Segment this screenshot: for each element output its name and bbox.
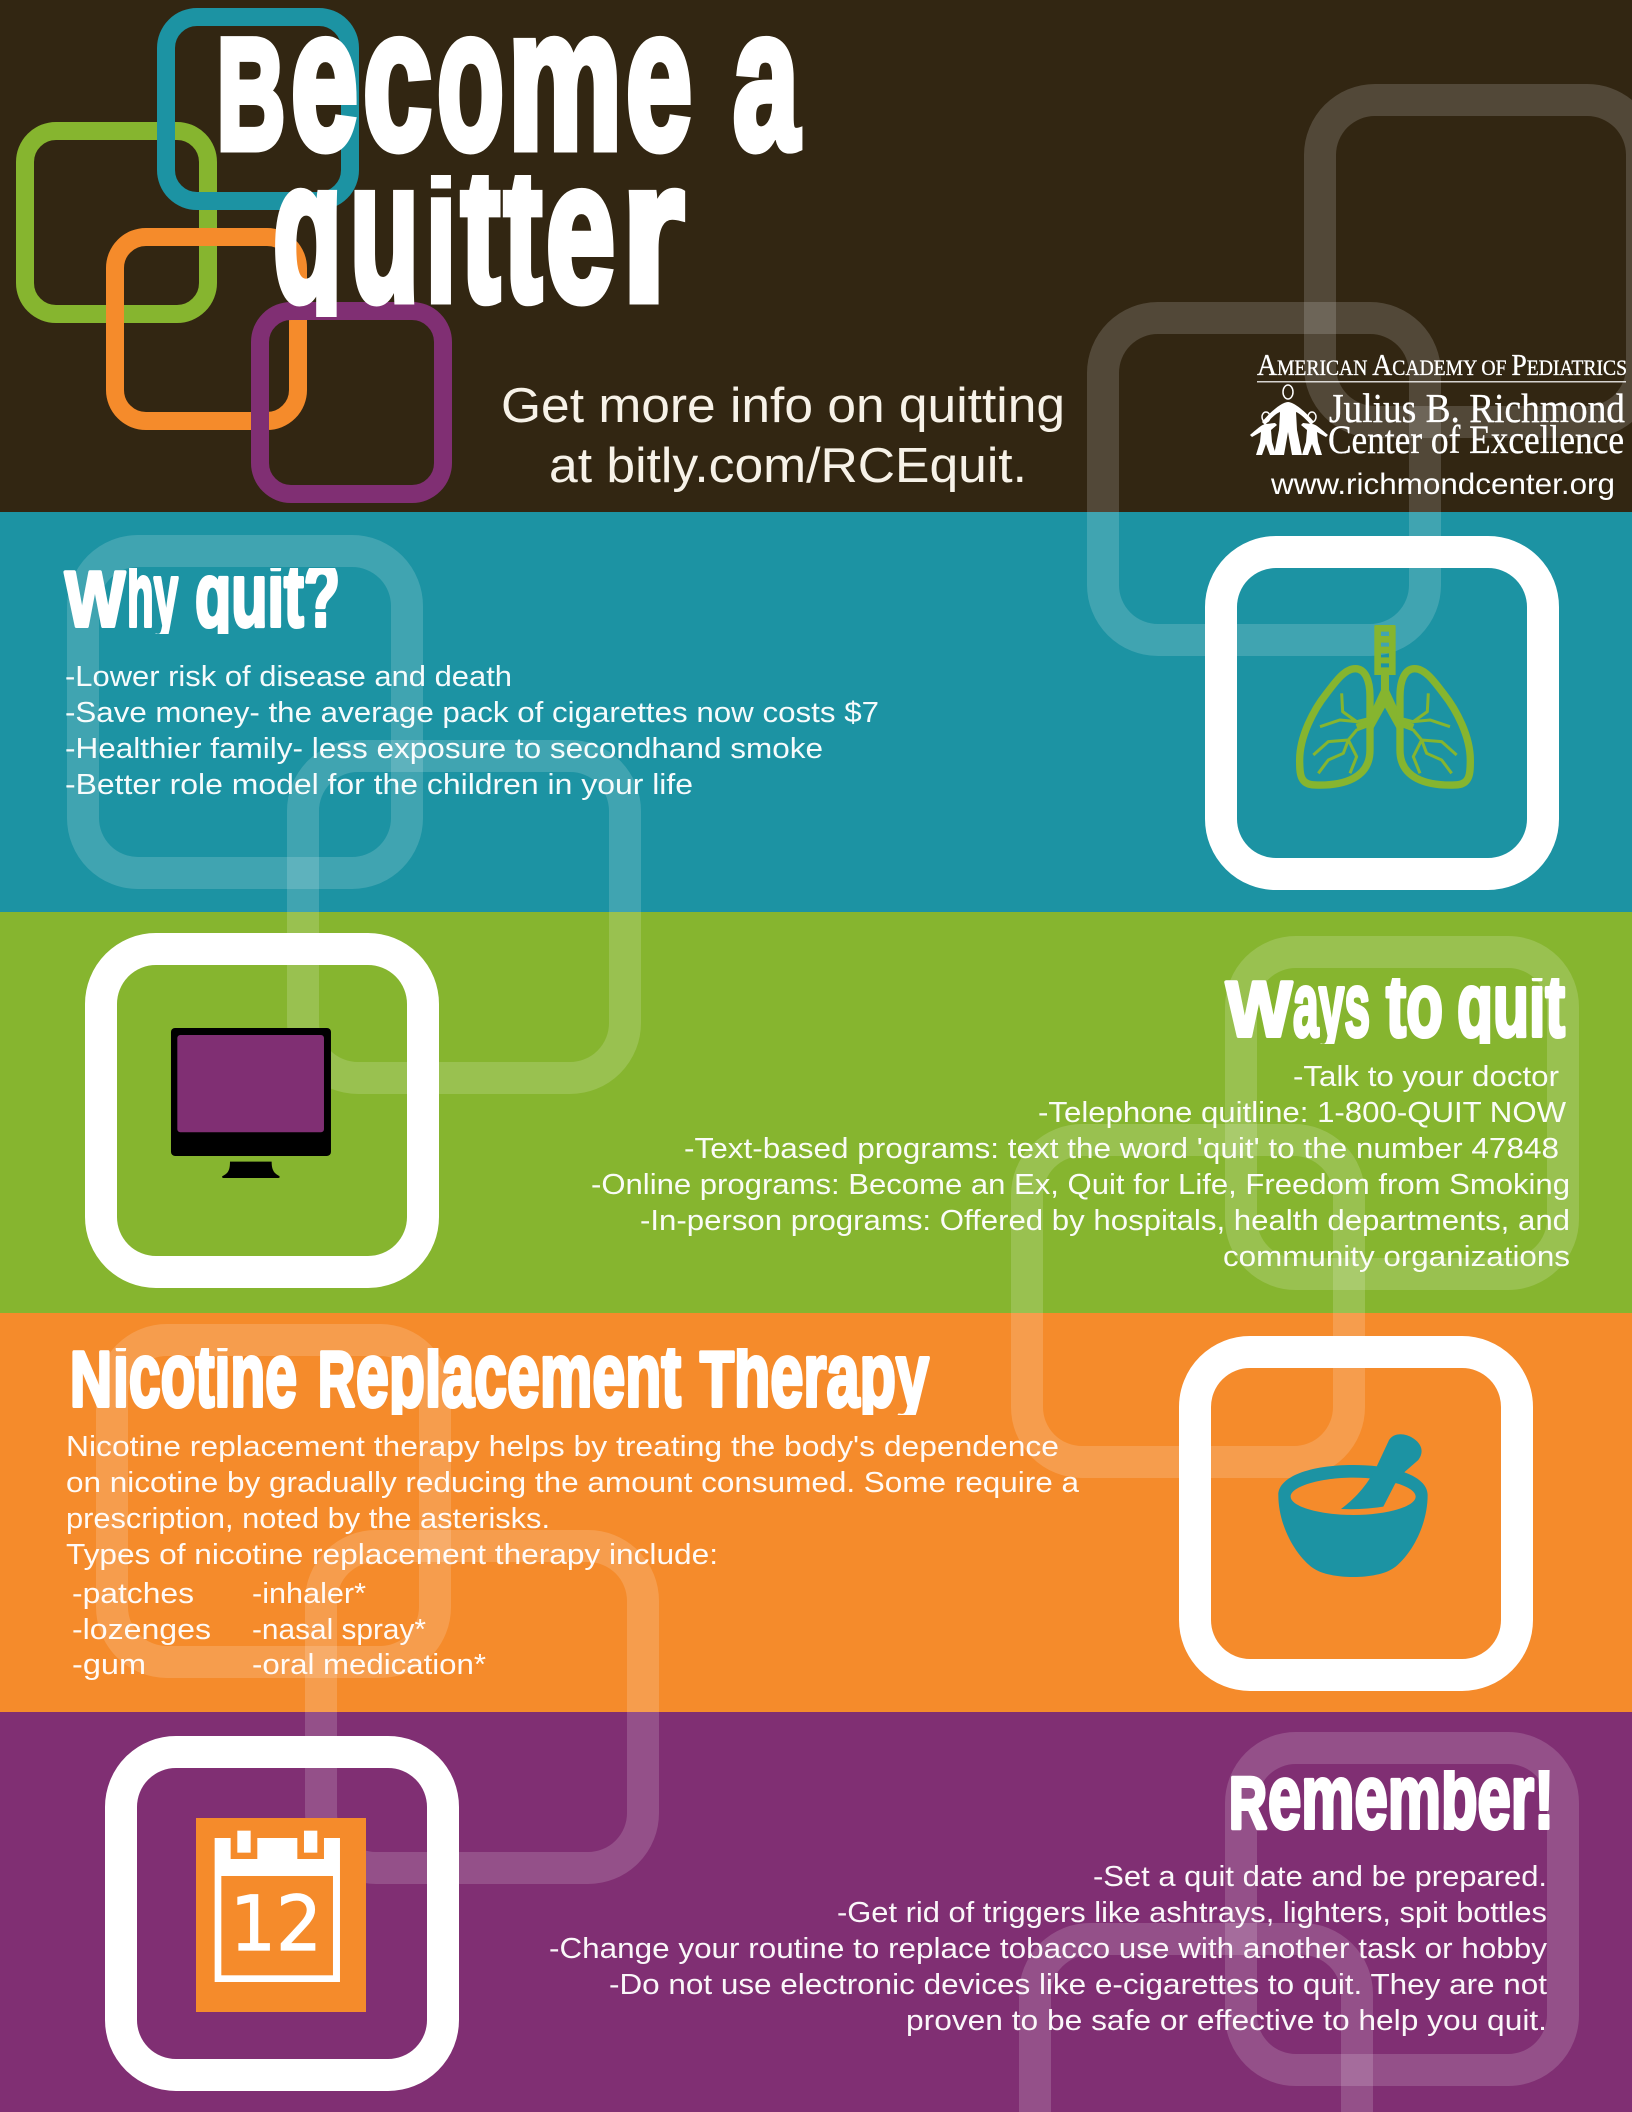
icon frame: mortar and pestle [1195, 1352, 1517, 1675]
logo: American Academy of Pediatrics Julius B. Richmond Center: www.richmondcenter.org [1270, 468, 1615, 501]
panel: remember background [0, 1712, 1632, 2112]
text block: remember list: proven to be safe or effective to help you quit. [906, 2005, 1547, 2037]
heading: Ways to quit: to [1386, 955, 1443, 1056]
text block: reasons to quit: -Better role model for the children in your life [65, 769, 693, 801]
logo: American Academy of Pediatrics Julius B. Richmond Center [1250, 347, 1627, 501]
icon: family figures [1250, 385, 1328, 455]
subtitle: more info link: at bitly.com/RCEquit. [549, 439, 1027, 493]
icon: computer monitor [171, 1028, 331, 1178]
heading: Nicotine Replacement Therapy: icotine [113, 1325, 297, 1426]
logo: American Academy of Pediatrics Julius B. Richmond Center: AMERICAN ACADEMY OF PEDIATRICS [1257, 347, 1627, 382]
heading: Nicotine Replacement Therapy: T [700, 1335, 734, 1423]
icon frame: lungs [1221, 552, 1543, 874]
text block: nicotine replacement description: prescription, noted by the asterisks. [66, 1503, 550, 1535]
text block: remember list: -Get rid of triggers like ashtrays, lighters, spit bottles [837, 1897, 1547, 1929]
text block: remember list [549, 1861, 1548, 2037]
text block: nicotine replacement description: Types of nicotine replacement therapy include: [66, 1539, 718, 1571]
text block: reasons to quit: -Lower risk of disease and death [65, 661, 512, 693]
title: Become a quitter: r [622, 120, 684, 343]
text block: types of therapy list: -patches [72, 1578, 194, 1610]
heading: Nicotine Replacement Therapy: R [318, 1335, 355, 1423]
icon: calendar: 12 [230, 1879, 322, 1968]
heading: Why quit?: hy [127, 545, 178, 646]
icon frame: calendar [121, 1752, 443, 2075]
text block: ways to quit list: -Text-based programs: text the word 'quit' to the number 47848 [684, 1133, 1559, 1165]
text block: ways to quit list: -In-person programs: Offered by hospitals, health departments, and [640, 1205, 1570, 1237]
panel: nicotine replacement therapy background [0, 1313, 1632, 1712]
text block: types of therapy list [72, 1578, 486, 1681]
text block: ways to quit list: -Online programs: Become an Ex, Quit for Life, Freedom from Smoking [591, 1169, 1570, 1201]
title: Become a quitter: u [350, 120, 419, 343]
title: Become a quitter [220, 36, 802, 317]
title: Become a quitter: B [217, 8, 285, 182]
heading: Ways to quit: ays [1293, 955, 1370, 1056]
heading: Why quit?: quit? [195, 545, 340, 646]
panel: header background [0, 0, 1632, 512]
text block: ways to quit list: -Talk to your doctor [1293, 1061, 1560, 1093]
text block: nicotine replacement description: Nicotine replacement therapy helps by treating the body's dependence [66, 1431, 1059, 1463]
text block: nicotine replacement description [66, 1431, 1079, 1571]
icon: mortar and pestle [1278, 1434, 1428, 1577]
subtitle: more info link: Get more info on quitting [501, 379, 1065, 433]
title: Become a quitter: t [461, 120, 500, 343]
heading: Remember!: R [1229, 1763, 1267, 1844]
icon: lungs [1300, 625, 1470, 785]
heading: Nicotine Replacement Therapy: eplacement [356, 1325, 681, 1426]
icon: calendar [196, 1818, 366, 2012]
text block: reasons to quit [65, 661, 879, 801]
title: Become a quitter: q [273, 120, 342, 343]
heading: Ways to quit [1224, 978, 1566, 1044]
text block: remember list: -Set a quit date and be prepared. [1093, 1861, 1547, 1893]
title: Become a quitter: e [546, 120, 615, 343]
icon frame: computer monitor [101, 949, 423, 1272]
text block: reasons to quit: -Healthier family- less exposure to secondhand smoke [65, 733, 823, 765]
text block: types of therapy list: -nasal spray* [252, 1614, 426, 1646]
text block: reasons to quit: -Save money- the average pack of cigarettes now costs $7 [65, 697, 879, 729]
text block: ways to quit list: community organizations [1223, 1241, 1570, 1273]
heading: Remember! [1231, 1770, 1550, 1831]
logo: four interlocking coloured squares [25, 17, 443, 494]
subtitle: more info link [501, 379, 1065, 493]
title: Become a quitter: i [426, 133, 456, 340]
heading: Ways to quit: quit [1457, 955, 1565, 1056]
heading: Nicotine Replacement Therapy: herapy [734, 1325, 929, 1426]
text block: ways to quit list: -Telephone quitline: 1-800-QUIT NOW [1038, 1097, 1566, 1129]
text block: nicotine replacement description: on nicotine by gradually reducing the amount consumed. Some require a [66, 1467, 1079, 1499]
text block: remember list: -Do not use electronic devices like e-cigarettes to quit. They are not [609, 1969, 1547, 2001]
text block: types of therapy list: -inhaler* [252, 1578, 366, 1610]
heading: Nicotine Replacement Therapy [72, 1348, 930, 1415]
text block: remember list: -Change your routine to replace tobacco use with another task or hobby [549, 1933, 1548, 1965]
text block: ways to quit list [591, 1061, 1570, 1273]
heading: Why quit?: W [65, 555, 125, 643]
text block: types of therapy list: -gum [72, 1649, 146, 1681]
heading: Nicotine Replacement Therapy: N [70, 1335, 112, 1423]
panel: why quit background [0, 512, 1632, 912]
heading: Why quit? [63, 568, 338, 634]
text block: types of therapy list: -oral medication* [252, 1649, 486, 1681]
panel: ways to quit background [0, 912, 1632, 1313]
text block: types of therapy list: -lozenges [72, 1614, 211, 1646]
heading: Ways to quit: W [1226, 965, 1292, 1053]
title: Become a quitter: t [504, 120, 542, 343]
